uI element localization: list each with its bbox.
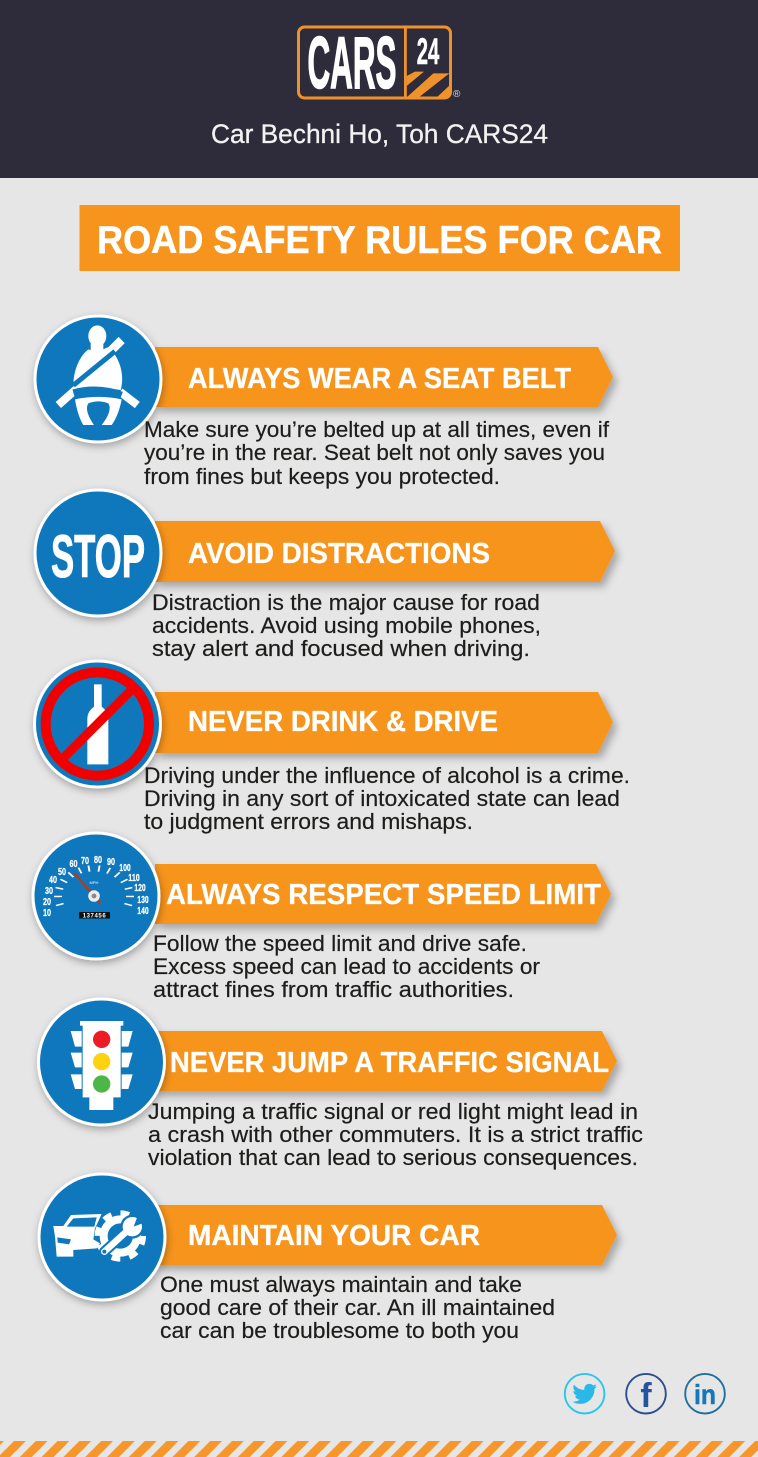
icon: speedometer: 20 [43,896,51,908]
icon: speedometer: 60 [70,858,78,870]
social icons [565,1374,725,1415]
body text [144,763,630,834]
body text: Driving in any sort of intoxicated state can lead [144,786,620,811]
body text: stay alert and focused when driving. [152,636,530,661]
icon: speedometer [32,832,160,960]
icon: speedometer: 110 [128,872,140,884]
heading: NEVER JUMP A TRAFFIC SIGNAL [170,1047,609,1079]
CARS24 logo: ® [453,89,461,100]
body text: good care of their car. An ill maintained [160,1295,555,1320]
icon: car and wrench [38,1172,166,1302]
rule 1: seat belt [34,314,613,489]
rule 3: drink and drive [33,660,630,834]
icon: speedometer: 90 [107,856,115,868]
banner: avoid distractions [155,521,615,582]
body text: violation that can lead to serious consequences. [148,1145,638,1170]
body text [152,590,541,661]
body text [153,931,540,1002]
title banner: ROAD SAFETY RULES FOR CAR [97,219,662,262]
icon: traffic light [37,998,166,1126]
icon: facebook [626,1374,666,1415]
body text: Make sure you’re belted up at all times, even if [144,417,610,442]
body text: Jumping a traffic signal or red light might lead in [148,1099,638,1124]
body text: attract fines from traffic authorities. [153,977,514,1002]
icon: linkedin [685,1374,725,1413]
body text: from fines but keeps you protected. [144,464,500,489]
icon: stop sign: STOP [51,523,145,590]
CARS24 logo: CARS [308,23,396,104]
title banner [80,205,680,271]
icon: speedometer: 140 [137,905,149,917]
header band [0,0,758,178]
body text: to judgment errors and mishaps. [144,809,473,834]
icon: speedometer: 10 [43,907,51,919]
heading: NEVER DRINK & DRIVE [188,706,498,738]
body text: One must always maintain and take [160,1272,522,1297]
banner: always wear a seat belt [155,347,613,407]
footer hazard stripes [0,1441,758,1457]
icon: seat belt [34,314,162,444]
icon: speedometer: 80 [94,854,102,866]
heading: MAINTAIN YOUR CAR [188,1220,480,1252]
heading: ALWAYS WEAR A SEAT BELT [188,363,571,395]
rule 5: traffic signal [37,998,643,1170]
body text: Follow the speed limit and drive safe. [153,931,527,956]
body text [160,1272,555,1343]
icon: speedometer: 30 [45,885,53,897]
body text: Excess speed can lead to accidents or [153,954,540,979]
icon: stop sign [34,488,162,618]
body text: car can be troublesome to both you [160,1318,519,1343]
body text: accidents. Avoid using mobile phones, [152,613,541,638]
body text: you’re in the rear. Seat belt not only saves you [144,440,605,465]
icon: facebook: f [640,1377,652,1415]
rule 2: distractions [34,488,615,661]
body text: Distraction is the major cause for road [152,590,540,615]
heading: ALWAYS RESPECT SPEED LIMIT [166,879,601,911]
banner: maintain your car [155,1205,617,1265]
rule 6: maintain car [38,1172,617,1343]
icon: speedometer: 70 [81,855,89,867]
icon: speedometer: 100 [119,862,131,874]
banner: always respect speed limit [155,864,611,924]
CARS24 logo: 24 [417,31,439,72]
body text [148,1099,643,1170]
rule 4: speed limit [32,832,611,1002]
icon: speedometer: MPH [90,880,99,885]
body text: a crash with other commuters. It is a strict traffic [148,1122,643,1147]
icon: speedometer: 50 [58,866,66,878]
icon: speedometer: 137456 [83,914,106,920]
heading: AVOID DISTRACTIONS [188,538,490,570]
banner: never jump a traffic signal [155,1031,617,1091]
icon: speedometer: 40 [49,874,57,886]
icon: speedometer: 120 [134,882,146,894]
body text: Driving under the influence of alcohol is a crime. [144,763,630,788]
banner: never drink and drive [155,692,613,753]
icon: linkedin: in [694,1379,716,1410]
icon: twitter [565,1374,604,1413]
icon: speedometer: 130 [137,894,149,906]
body text [144,417,610,489]
tagline: Car Bechni Ho, Toh CARS24 [211,119,548,149]
icon: no alcohol [33,660,162,788]
